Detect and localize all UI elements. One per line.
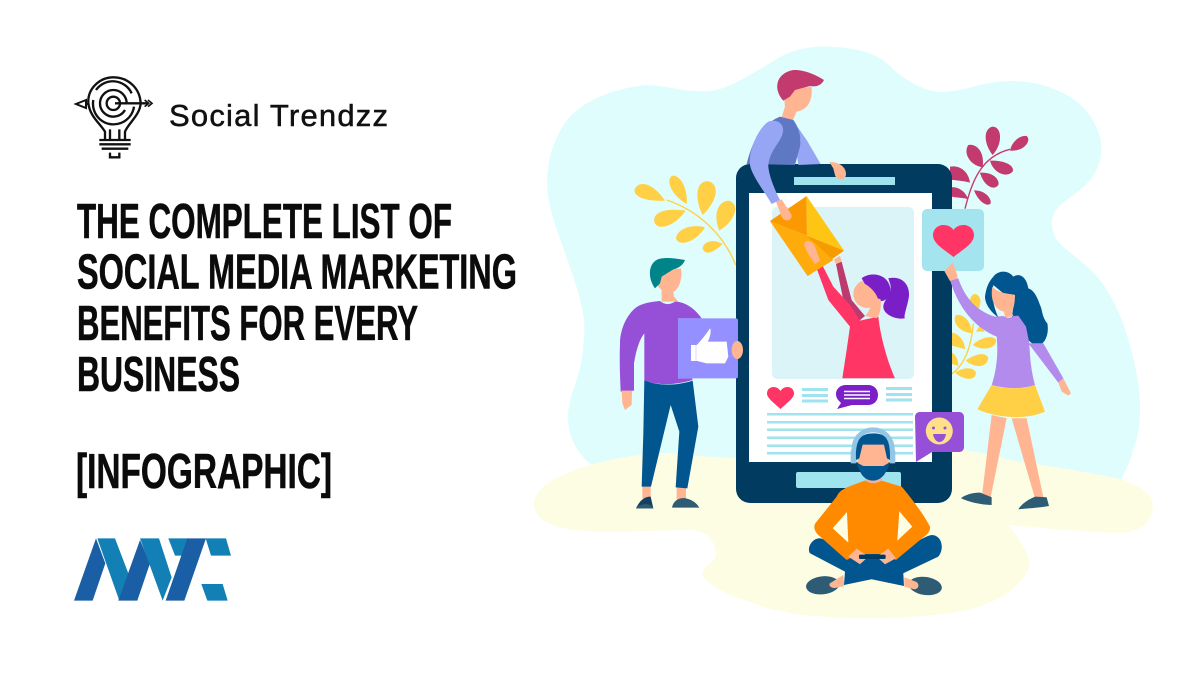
title: BUSINESS <box>77 348 240 402</box>
person: woman with blue hair <box>944 263 1071 509</box>
background blob: cyan <box>547 47 1140 482</box>
comment bubble <box>836 385 878 409</box>
envelope <box>770 196 844 276</box>
person: man leaning over the phone <box>747 70 846 220</box>
icon: thumbs up <box>691 328 728 363</box>
icon: target lightbulb <box>76 77 152 157</box>
title: SOCIAL MEDIA MARKETING <box>77 246 517 300</box>
person: man with thumbs up card <box>620 258 743 508</box>
post heart icon <box>767 387 794 409</box>
icon: smiley <box>926 418 953 444</box>
brand logo: Social Trendzz <box>76 77 388 157</box>
post image panel <box>772 207 914 379</box>
title: THE COMPLETE LIST OF <box>77 195 452 249</box>
background blob: cream ground <box>534 447 1153 618</box>
plant: yellow branch left <box>635 176 736 265</box>
title: [INFOGRAPHIC] <box>76 445 332 499</box>
post caption lines <box>767 413 913 454</box>
person: seated man with headset <box>805 430 943 597</box>
person: girl in pink inside phone <box>815 256 909 378</box>
title: BENEFITS FOR EVERY <box>77 297 418 351</box>
hand holding card <box>732 341 743 359</box>
icon: heart <box>933 225 974 257</box>
phone home bar <box>796 472 901 488</box>
phone <box>736 164 952 503</box>
post text lines right <box>886 387 912 402</box>
girl's raised hand over envelope <box>804 241 820 264</box>
heart card <box>922 209 984 271</box>
post text lines left <box>802 388 828 402</box>
plant: magenta branch <box>950 127 1028 209</box>
company logo: MC monogram <box>74 538 231 601</box>
phone body <box>736 164 952 503</box>
title <box>76 195 517 499</box>
like card <box>678 318 738 378</box>
brand name: Social Trendzz <box>169 98 388 133</box>
phone screen <box>749 193 932 462</box>
phone speaker bar <box>794 177 895 185</box>
smile bubble <box>915 412 964 462</box>
plant: yellow branch right <box>950 294 996 379</box>
